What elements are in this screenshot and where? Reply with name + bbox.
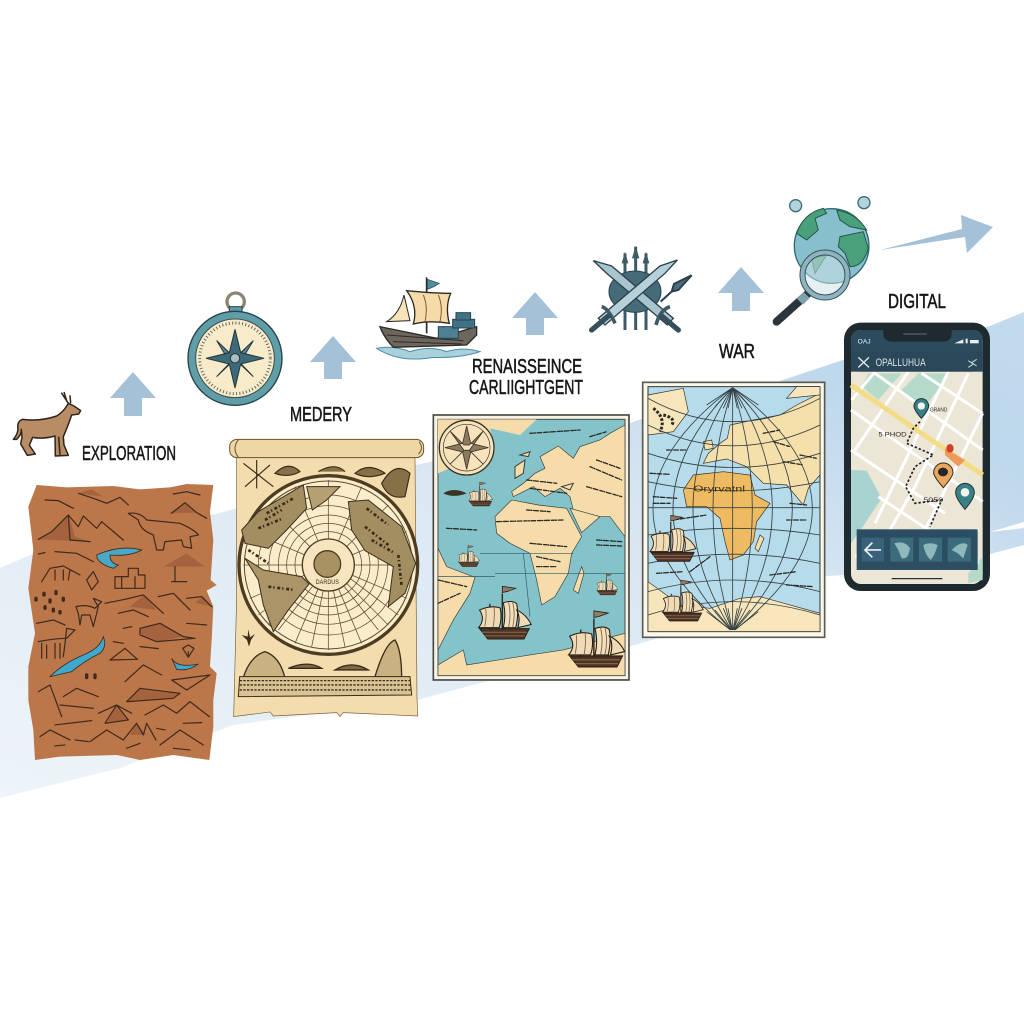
label: renaissance: RENAISSEINCE (472, 356, 582, 378)
icon: sailing ship (377, 277, 480, 359)
arrow: up 4 (718, 267, 764, 311)
background: diagonal watercolor band (0, 312, 1024, 798)
icon: pocket compass (188, 293, 282, 405)
map label: grand: GRAND (930, 408, 947, 414)
arrow: onward to future (880, 215, 993, 253)
map label: phod: 5 PHOD (878, 432, 907, 439)
step 2: medieval (188, 293, 424, 717)
status text: OAJ (858, 338, 871, 345)
cave map on hide (28, 484, 217, 760)
step 3: renaissance (377, 277, 629, 680)
step 4: war (592, 246, 825, 637)
app title: OPALLUHUA (876, 357, 926, 369)
step 1: exploration (13, 392, 217, 760)
nautical map (433, 415, 629, 680)
scroll world map (230, 439, 424, 717)
label: medery: MEDERY (290, 404, 352, 426)
icon: globe with magnifier (777, 197, 870, 322)
label: exploration: EXPLORATION (82, 443, 176, 465)
arrow: up 3 (512, 292, 558, 335)
label: digital: DIGITAL (888, 291, 946, 313)
map label on africa: Oryrvatnl (693, 484, 745, 494)
map label: 5050: 5050 (923, 497, 944, 504)
arrow: up 2 (310, 336, 356, 379)
icon: crossed swords and shield (592, 246, 692, 330)
icon: deer (13, 392, 81, 456)
projected world map (643, 382, 825, 637)
label: enlightenment: CARLIIGHTGENT (469, 377, 583, 399)
arrow: up 1 (110, 372, 156, 416)
map cartouche text: DARDUS (316, 579, 339, 586)
label: war: WAR (719, 341, 755, 363)
step 5: digital (777, 197, 990, 591)
smartphone map app (844, 323, 990, 591)
